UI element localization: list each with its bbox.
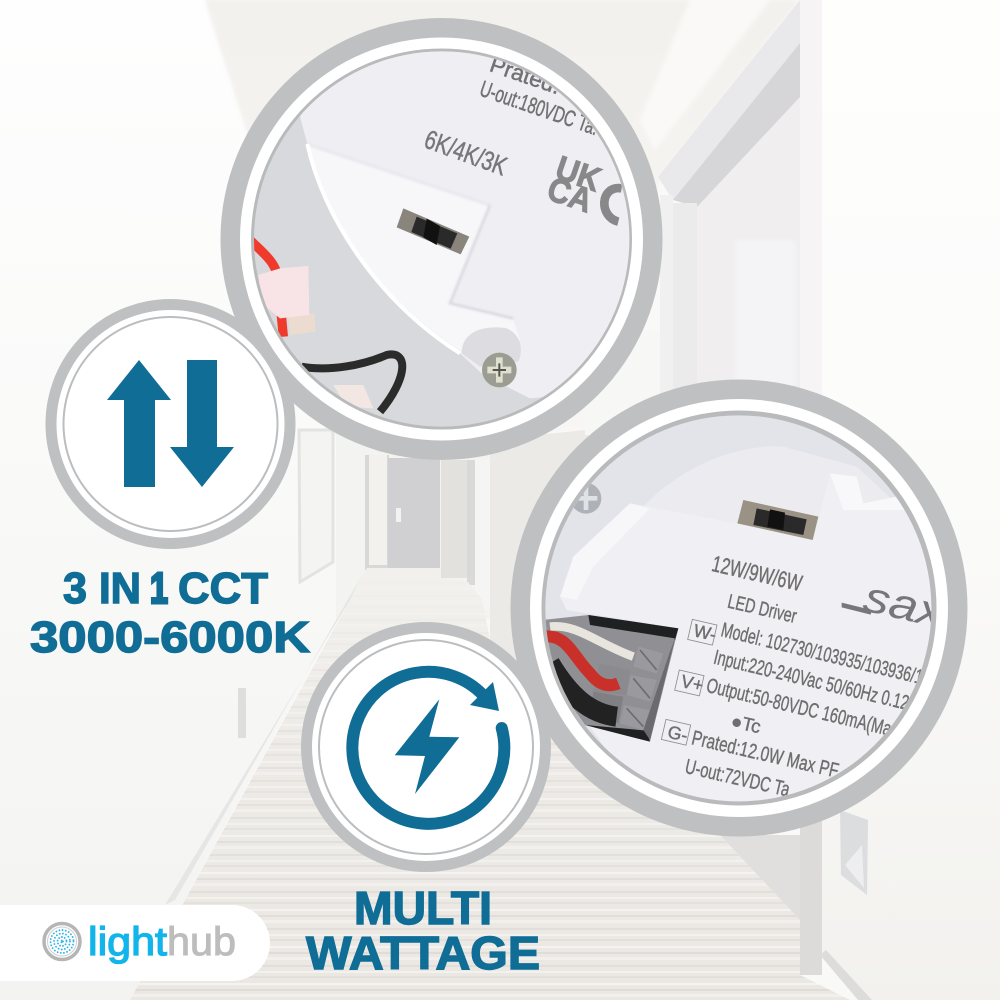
heading: 3 in 1 CCT, 3000-6000K [30, 564, 310, 662]
far door end of corridor [336, 430, 496, 620]
driver label text: U-out:72VDC Ta [683, 755, 792, 802]
left wall switch [238, 688, 246, 738]
driver label text: Input:220-240Vac 50/60Hz 0.12 [711, 646, 911, 715]
right door and frame [658, 0, 822, 975]
panel: 3 in 1 CCT icon badge [46, 299, 296, 549]
switch [737, 500, 818, 540]
panel: multi wattage icon badge [301, 622, 551, 872]
icon: up and down arrows [107, 360, 234, 487]
heading: 3 in 1 CCT, 3000-6000K: CCT [178, 564, 268, 613]
screw [462, 327, 521, 387]
driver label text: V+ [679, 671, 706, 696]
driver label text: LED Driver [726, 591, 799, 628]
driver label text: ●Tc [729, 710, 763, 737]
heading: 3 in 1 CCT, 3000-6000K: 1 [150, 564, 168, 613]
panel: CCT switch close-up [220, 18, 670, 460]
brand mark: sax [859, 573, 950, 638]
driver label text: G- [666, 722, 690, 746]
brand mark [842, 590, 932, 624]
left wall picture frame [299, 430, 333, 582]
cable tie and wires [250, 240, 402, 412]
label text: Prated: Prated: [487, 51, 564, 99]
driver label text [666, 550, 925, 802]
switch [397, 208, 469, 254]
icon: power cycle [352, 672, 504, 824]
UKCA mark: UK [551, 149, 606, 200]
heading: multi wattage: WATTAGE [306, 927, 540, 979]
logo: lighthub: hub [167, 920, 236, 964]
logo: lighthub [0, 905, 270, 981]
logo: lighthub: light [88, 920, 167, 964]
driver label text: W- [692, 620, 718, 645]
right wall plate [840, 810, 868, 895]
label text: U-out: U-out:180VDC Ta: [477, 75, 602, 140]
UKCA mark: CA [542, 170, 597, 221]
driver label text: 12W/9W/6W [710, 550, 805, 596]
heading: 3 in 1 CCT, 3000-6000K: 3000-6000K [30, 613, 310, 662]
heading: multi wattage [306, 882, 540, 979]
wire terminal block [543, 615, 678, 742]
label text: 6K/4K/3K: 6K/4K/3K [421, 124, 511, 182]
driver label text: Prated:12.0W Max PF [690, 726, 841, 783]
panel: driver label close-up [510, 380, 970, 840]
driver label text: Output:50-80VDC 160mA(Max [704, 674, 901, 743]
UKCA mark [542, 149, 622, 222]
heading: multi wattage: MULTI [354, 882, 492, 934]
screw [574, 484, 602, 514]
heading: 3 in 1 CCT, 3000-6000K: 3 [63, 564, 87, 613]
heading: 3 in 1 CCT, 3000-6000K: IN [99, 564, 141, 613]
